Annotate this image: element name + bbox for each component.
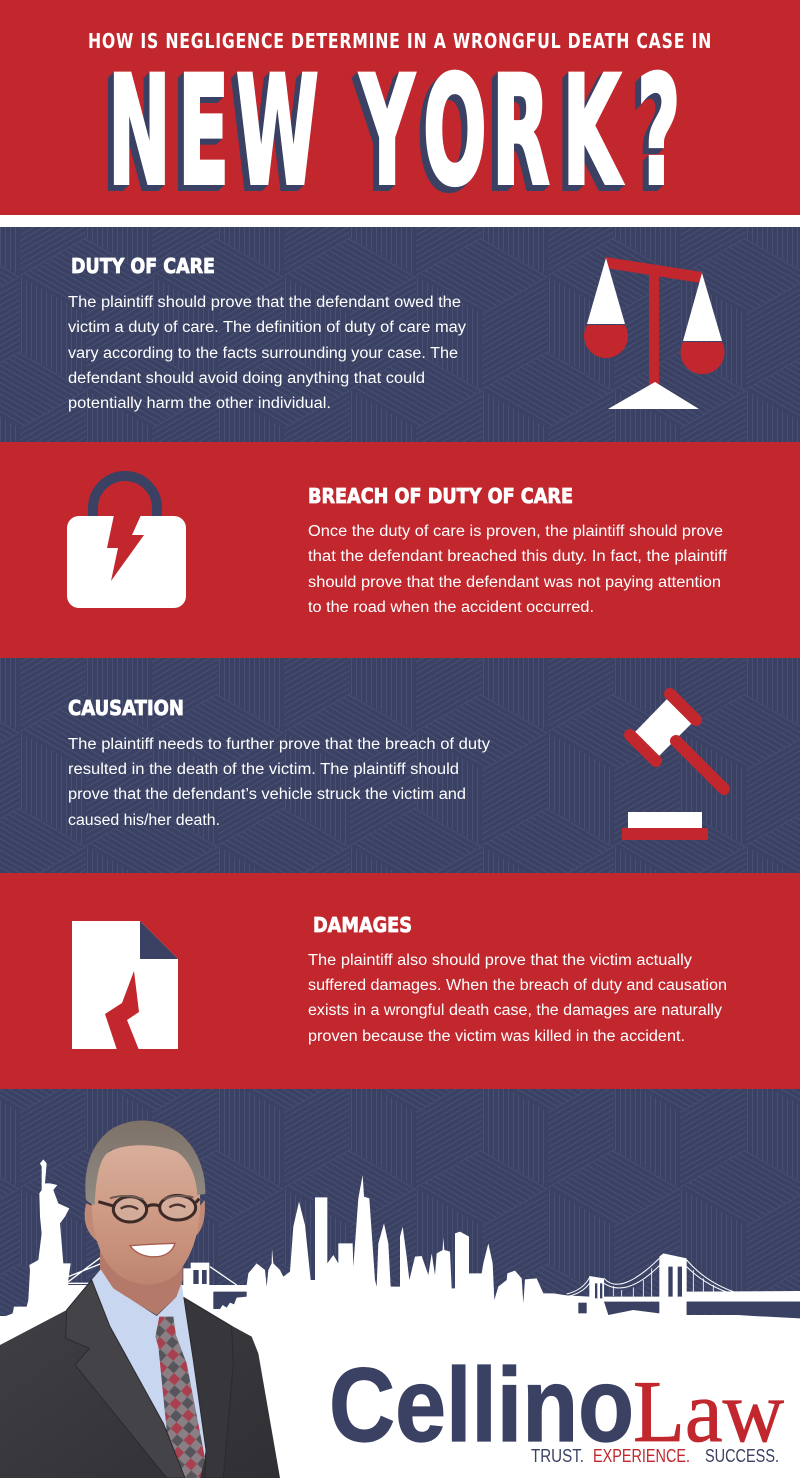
- neck: [100, 1247, 183, 1315]
- text block: causation: prove that the defendant’s vehicle struck the victim and: [68, 786, 466, 803]
- text block: breach: [308, 523, 728, 616]
- text block: breach: to the road when the accident occurred.: [308, 599, 594, 616]
- text block: breach: Once the duty of care is proven, the plaintiff should prove: [308, 523, 723, 540]
- icon: broken padlock: [67, 476, 186, 608]
- text block: damages: suffered damages. When the breach of duty and causation: [308, 977, 727, 994]
- tagline: [531, 1446, 779, 1466]
- heading: damages: DAMAGES: [313, 913, 412, 937]
- left lapel: [66, 1280, 185, 1478]
- glasses: [98, 1195, 199, 1222]
- eyes: [121, 1205, 185, 1209]
- skyline: New York silhouette: [0, 1159, 800, 1478]
- icon: torn document: [72, 921, 178, 1050]
- logo: Cellino Law: Law: [633, 1364, 784, 1461]
- text block: breach: should prove that the defendant was not paying attention: [308, 574, 721, 591]
- heading: duty of care: DUTY OF CARE: [71, 254, 215, 278]
- logo: Cellino Law: Cellino: [329, 1347, 634, 1464]
- ears: [85, 1200, 205, 1243]
- brows: [110, 1196, 193, 1199]
- face: [92, 1145, 200, 1284]
- text block: causation: The plaintiff needs to further prove that the breach of duty: [68, 736, 490, 753]
- tagline: EXPERIENCE.: [593, 1446, 690, 1466]
- shirt: [90, 1269, 206, 1478]
- suit jacket: [0, 1280, 280, 1478]
- icon: scales of justice: [584, 257, 724, 409]
- text block: damages: proven because the victim was killed in the accident.: [308, 1028, 685, 1045]
- tagline: SUCCESS.: [705, 1446, 779, 1466]
- panel: footer skyline background: [0, 1089, 800, 1478]
- photo: attorney portrait: [0, 1121, 280, 1478]
- hair: [85, 1121, 205, 1205]
- panel: duty of care: [0, 227, 800, 442]
- text block: causation: resulted in the death of the victim. The plaintiff should: [68, 761, 459, 778]
- heading: breach of duty of care: BREACH OF DUTY OF CARE: [308, 484, 573, 508]
- text block: damages: [308, 952, 727, 1045]
- text block: duty of care: victim a duty of care. The definition of duty of care may: [68, 319, 466, 336]
- text block: duty of care: [68, 294, 466, 412]
- text block: duty of care: potentially harm the other individual.: [68, 395, 331, 412]
- white divider band: [0, 215, 800, 227]
- text block: damages: The plaintiff also should prove that the victim actually: [308, 952, 692, 969]
- heading: causation: CAUSATION: [68, 696, 184, 720]
- tie: [155, 1317, 205, 1478]
- text block: duty of care: defendant should avoid doing anything that could: [68, 370, 425, 387]
- right lapel: [184, 1298, 233, 1478]
- text block: breach: that the defendant breached this duty. In fact, the plaintiff: [308, 548, 728, 565]
- text block: duty of care: The plaintiff should prove that the defendant owed the: [68, 294, 461, 311]
- title: New York?: NEW YORK?: [108, 44, 681, 218]
- panel: causation: [0, 658, 800, 873]
- icon: gavel: [622, 694, 724, 840]
- panel: damages: [0, 873, 800, 1089]
- text block: duty of care: vary according to the facts surrounding your case. The: [68, 345, 458, 362]
- smile: [130, 1243, 175, 1257]
- text block: causation: [68, 736, 490, 829]
- text block: causation: caused his/her death.: [68, 812, 220, 829]
- header panel: [0, 0, 800, 218]
- text block: damages: exists in a wrongful death case, the damages are naturally: [308, 1002, 722, 1019]
- panel: breach of duty of care: [0, 442, 800, 658]
- tagline: TRUST.: [531, 1446, 584, 1466]
